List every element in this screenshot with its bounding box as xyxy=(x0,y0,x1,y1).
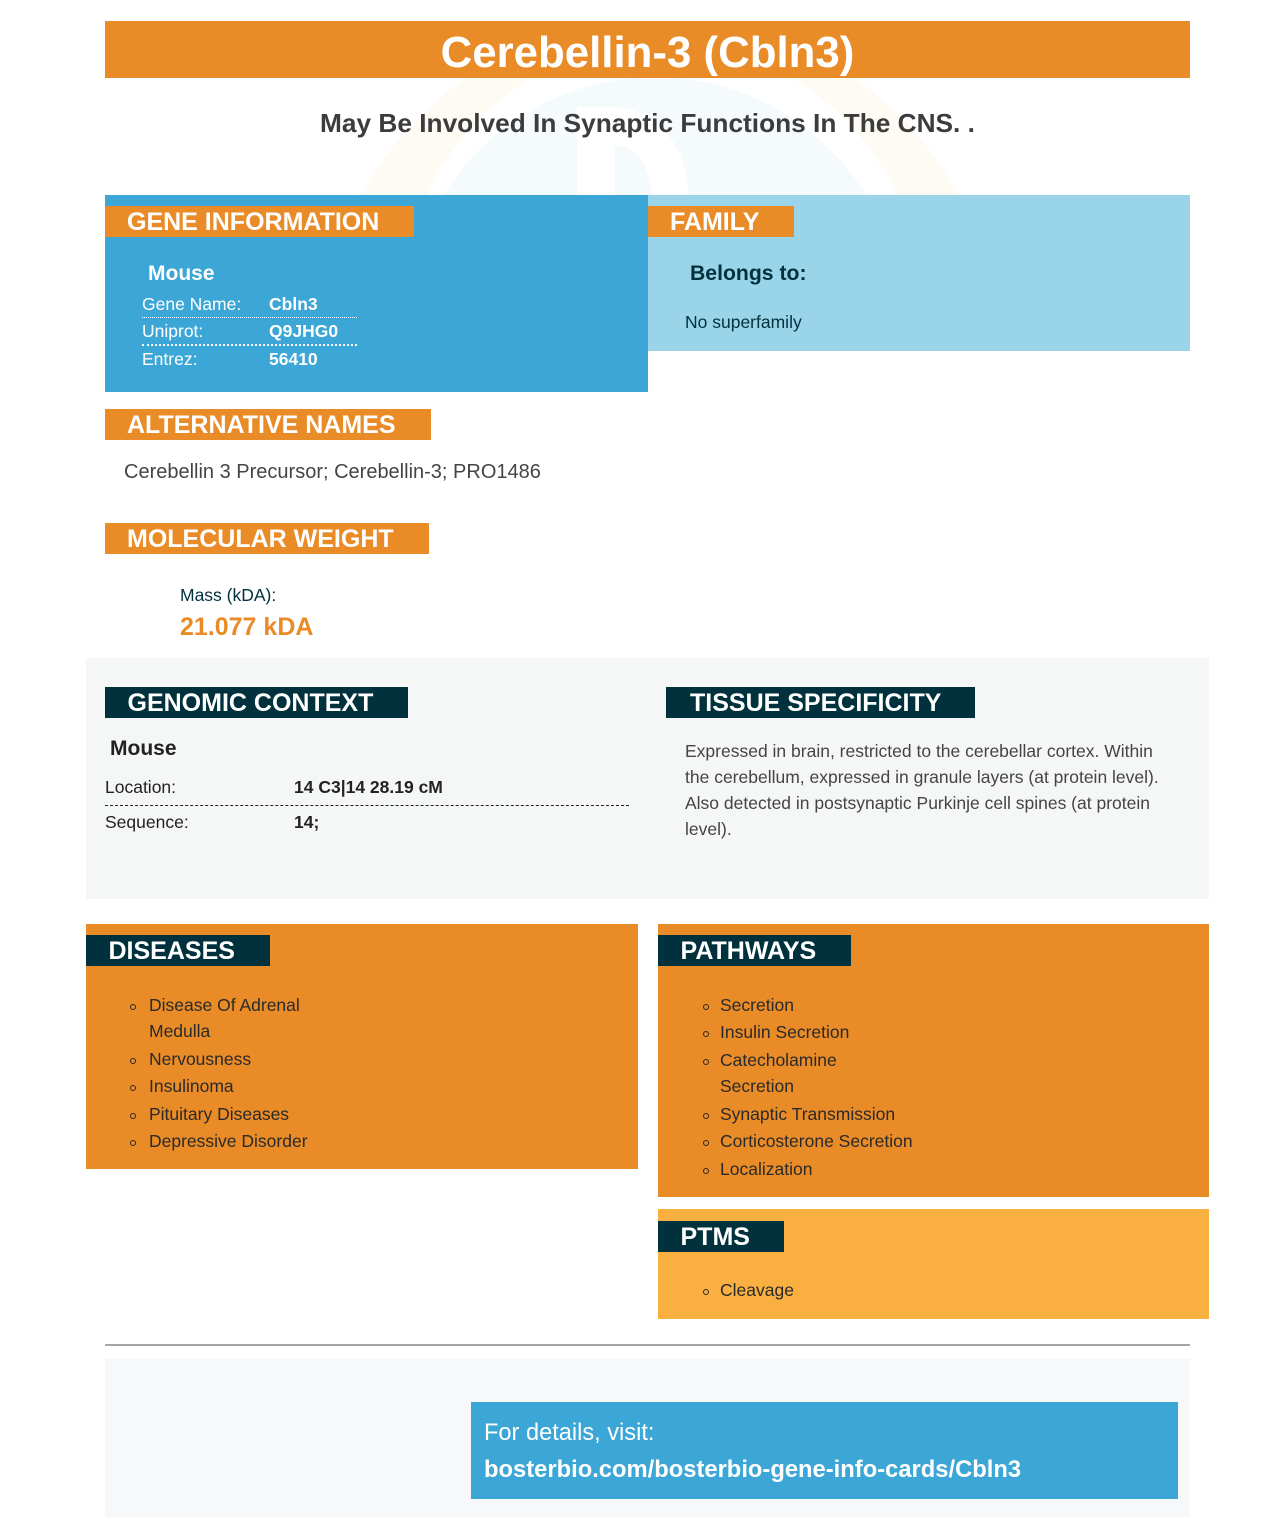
panel: footer xyxy=(105,1359,1190,1517)
entrez row xyxy=(142,349,318,369)
gene name row xyxy=(142,292,357,318)
heading: genomic context: GENOMIC CONTEXT xyxy=(128,689,373,717)
heading: family xyxy=(648,206,794,237)
entrez row: 56410 xyxy=(269,349,318,369)
mass label: Mass (kDA): xyxy=(180,585,276,605)
diseases list: Insulinoma xyxy=(149,1076,234,1096)
sequence row: 14; xyxy=(294,812,319,832)
tissue specificity text: Expressed in brain, restricted to the cerebellar cortex. Within xyxy=(685,741,1153,761)
heading: diseases xyxy=(86,935,270,966)
heading: molecular weight: MOLECULAR WEIGHT xyxy=(127,525,394,553)
heading: diseases: DISEASES xyxy=(108,937,235,965)
uniprot row: Q9JHG0 xyxy=(269,321,338,341)
location row xyxy=(105,774,629,806)
panel: gene information xyxy=(105,195,648,392)
panel: genomic context and tissue specificity xyxy=(86,658,1209,899)
entrez row: Entrez: xyxy=(142,349,197,369)
diseases list xyxy=(130,995,308,1151)
subtitle: May Be Involved In Synaptic Functions In The CNS. . xyxy=(320,108,975,138)
sequence row: Sequence: xyxy=(105,812,189,832)
panel: diseases xyxy=(86,924,638,1169)
heading: ptms: PTMS xyxy=(680,1223,750,1251)
watermark logo xyxy=(362,78,958,195)
pathways list: Insulin Secretion xyxy=(720,1022,849,1042)
pathways list: Corticosterone Secretion xyxy=(720,1131,913,1151)
heading: alternative names: ALTERNATIVE NAMES xyxy=(127,411,396,439)
gene name row: Gene Name: xyxy=(142,294,241,314)
family text: No superfamily xyxy=(685,312,802,332)
tissue specificity text xyxy=(685,741,1159,839)
uniprot row: Uniprot: xyxy=(142,321,203,341)
panel: ptms xyxy=(658,1209,1209,1319)
callout: details link xyxy=(471,1402,1178,1499)
alternative names text: Cerebellin 3 Precursor; Cerebellin-3; PRO1486 xyxy=(124,461,541,483)
ptms list: Cleavage xyxy=(720,1280,794,1300)
species label: Mouse xyxy=(110,737,177,760)
diseases list: Depressive Disorder xyxy=(149,1131,308,1151)
panel: pathways xyxy=(658,924,1209,1197)
diseases list: Pituitary Diseases xyxy=(149,1104,289,1124)
heading: family: FAMILY xyxy=(670,208,759,236)
diseases list: Nervousness xyxy=(149,1049,251,1069)
heading: tissue specificity: TISSUE SPECIFICITY xyxy=(690,689,941,717)
callout url: bosterbio.com/bosterbio-gene-info-cards/Cbln3 xyxy=(484,1456,1021,1483)
location row: 14 C3|14 28.19 cM xyxy=(294,777,443,797)
tissue specificity text: level). xyxy=(685,819,732,839)
heading: pathways: PATHWAYS xyxy=(680,937,816,965)
mass value: 21.077 kDA xyxy=(180,613,313,641)
location row: Location: xyxy=(105,777,176,797)
belongs to label: Belongs to: xyxy=(690,262,807,285)
tissue specificity text: the cerebellum, expressed in granule layers (at protein level). xyxy=(685,767,1159,787)
footer divider xyxy=(105,1344,1190,1346)
tissue specificity text: Also detected in postsynaptic Purkinje cell spines (at protein xyxy=(685,793,1150,813)
pathways list xyxy=(703,995,913,1179)
gene name row: Cbln3 xyxy=(269,294,318,314)
diseases list: Disease Of Adrenal Medulla xyxy=(149,995,300,1041)
title banner xyxy=(105,21,1190,78)
pathways list: Localization xyxy=(720,1159,812,1179)
heading: pathways xyxy=(658,935,851,966)
pathways list: Secretion xyxy=(720,995,794,1015)
heading: gene information: GENE INFORMATION xyxy=(127,208,379,236)
heading: ptms xyxy=(658,1221,784,1252)
callout label: For details, visit: xyxy=(484,1420,654,1446)
panel: family xyxy=(648,195,1190,351)
sequence row xyxy=(105,812,319,832)
pathways list: Synaptic Transmission xyxy=(720,1104,895,1124)
uniprot row xyxy=(142,319,357,346)
pathways list: Catecholamine Secretion xyxy=(720,1050,837,1096)
title banner: Cerebellin-3 (Cbln3) xyxy=(441,28,854,77)
species label: Mouse xyxy=(148,262,215,285)
